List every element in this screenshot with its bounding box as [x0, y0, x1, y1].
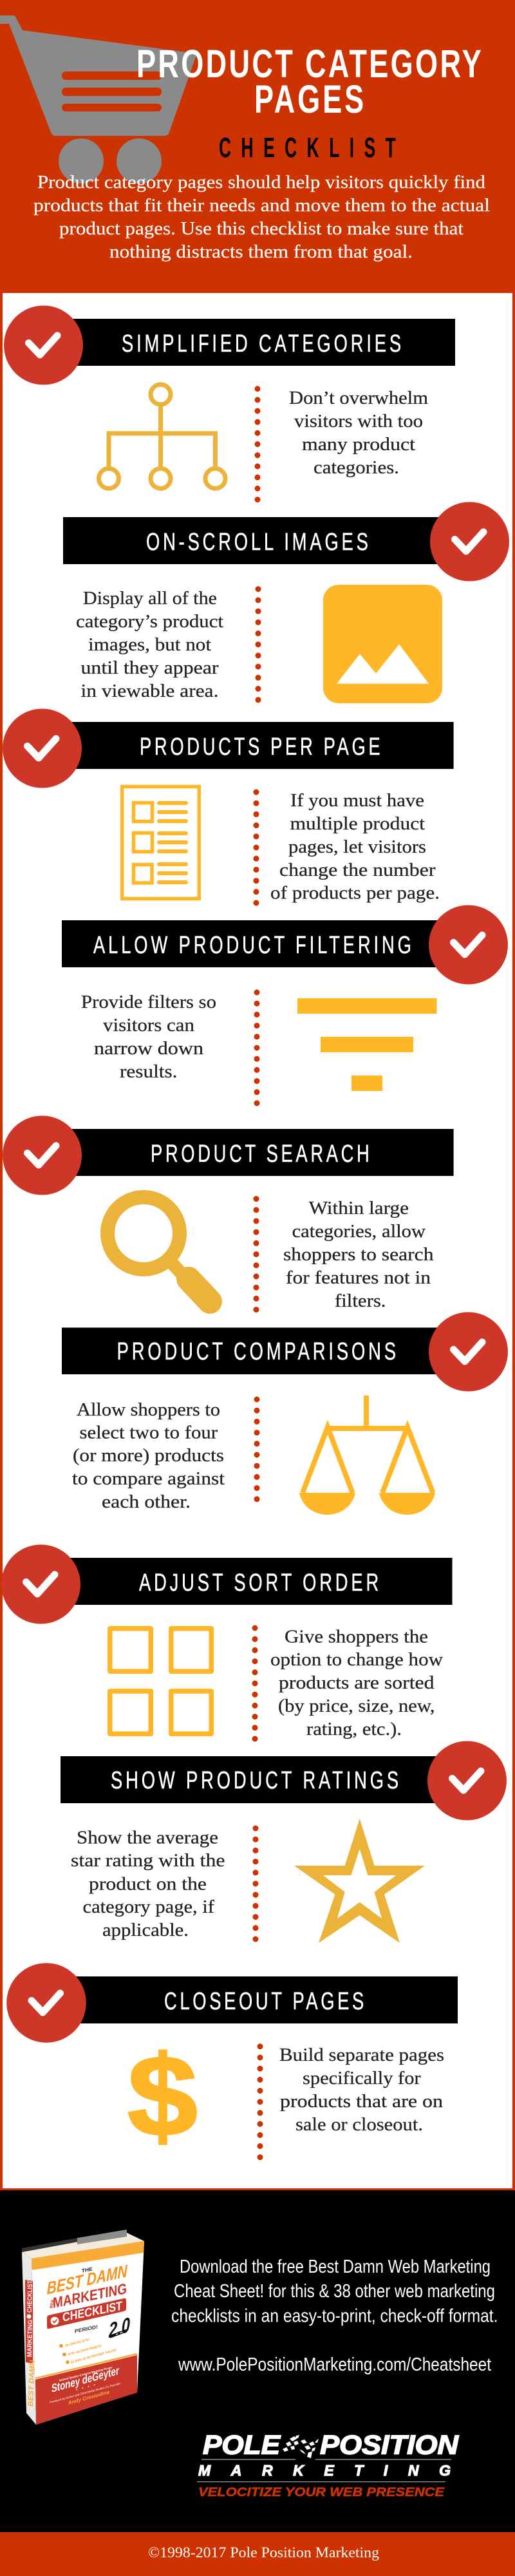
intro text [33, 172, 490, 262]
description: option to change how [270, 1650, 444, 1670]
section: products per page [3, 708, 454, 903]
description: Show the average [77, 1828, 218, 1848]
book cover image: Foreword by Author and Orbit Media Studios Co-Founder [50, 2382, 120, 2404]
book cover image: CHECKLIST [26, 2280, 34, 2313]
book cover image: BEST DAMN [27, 2360, 37, 2407]
description: products that are on [280, 2092, 443, 2112]
intro text: nothing distracts them from that goal. [109, 242, 413, 262]
heading bar [64, 1129, 454, 1176]
logo: Pole Position Marketing: VELOCITIZE YOUR WEB PRESENCE [198, 2485, 445, 2499]
description: to compare against [72, 1469, 225, 1489]
description: category’s product [76, 612, 223, 632]
description: Within large [309, 1198, 409, 1218]
description [270, 791, 440, 903]
book cover image: $1,000s IN INCREASED SALES! [70, 2348, 117, 2365]
description [76, 589, 223, 701]
section: simplified categories [4, 305, 455, 500]
description: product on the [89, 1874, 207, 1895]
description: filters. [335, 1291, 386, 1311]
description: specifically for [303, 2069, 421, 2088]
description: categories, allow [292, 1222, 426, 1242]
book cover image: CHECKLIST [62, 2300, 122, 2325]
icon: magnifying glass [108, 1197, 210, 1302]
description: multiple product [290, 814, 425, 834]
heading bar: SIMPLIFIED CATEGORIES [122, 330, 401, 357]
description [71, 1828, 225, 1940]
book cover image: Stoney deGeyter [52, 2363, 119, 2395]
description: Allow shoppers to [77, 1400, 220, 1420]
description: results. [120, 1062, 178, 1082]
heading bar [68, 1976, 458, 2023]
icon: dollar sign: $ [127, 2032, 198, 2160]
call to action text [171, 2257, 498, 2375]
icon: check badge [3, 1115, 82, 1195]
section: product comparisons [62, 1312, 508, 1515]
description: visitors can [103, 1016, 194, 1036]
description [289, 388, 428, 478]
heading bar: ON-SCROLL IMAGES [146, 529, 368, 556]
heading bar: CLOSEOUT PAGES [164, 1988, 364, 2015]
icon: check badge [429, 905, 508, 984]
description: in viewable area. [81, 681, 219, 701]
icon: checkered flags [283, 2435, 319, 2458]
title: PRODUCT CATEGORY [136, 42, 482, 86]
heading bar: PRODUCT SEARACH [151, 1141, 370, 1168]
description: rating, etc.). [306, 1719, 402, 1739]
section: adjust sort order [1, 1544, 452, 1739]
heading bar [62, 1328, 448, 1374]
book cover image: THE [82, 2266, 93, 2274]
heading bar [64, 1558, 452, 1605]
footer bar: ©1998-2017 Pole Position Marketing [148, 2544, 380, 2561]
icon: four-square grid [110, 1629, 211, 1734]
description: category page, if [82, 1897, 215, 1917]
description [279, 2045, 444, 2135]
description: many product [302, 435, 415, 455]
logo: Pole Position Marketing: POSITION [320, 2430, 460, 2460]
section: closeout pages [6, 1963, 458, 2160]
book cover image: National Speaker & Internet Marketing Pioneer [59, 2365, 113, 2382]
book cover image: 675+ ACTION POINTS! [68, 2344, 102, 2356]
icon: star outline [294, 1819, 425, 1943]
description: (by price, size, new, [278, 1696, 435, 1716]
book cover image [22, 2230, 144, 2425]
icon: hierarchy tree [99, 384, 225, 488]
description: applicable. [102, 1920, 189, 1940]
heading bar [62, 920, 448, 967]
icon: balance scale [299, 1396, 435, 1515]
footer bar [0, 2532, 515, 2576]
icon: document list [122, 787, 199, 899]
description: Give shoppers the [285, 1627, 428, 1647]
icon: check badge [429, 1312, 508, 1391]
heading bar: ADJUST SORT ORDER [139, 1569, 379, 1596]
logo: Pole Position Marketing [197, 2430, 460, 2499]
panel: white checklist body [0, 292, 515, 2190]
description: select two to four [80, 1423, 218, 1443]
description: change the number [279, 860, 436, 880]
title [136, 42, 482, 122]
description: narrow down [94, 1039, 203, 1059]
heading bar [61, 1756, 447, 1803]
title: PAGES [254, 77, 364, 122]
book cover image: WEB [50, 2299, 55, 2309]
heading bar: SHOW PRODUCT RATINGS [111, 1767, 398, 1794]
description [283, 1198, 434, 1311]
description: Display all of the [83, 589, 217, 609]
icon: shopping cart [0, 15, 197, 184]
book cover image: BEST DAMN [47, 2260, 128, 2298]
book cover image: PERIOD! [75, 2324, 98, 2334]
icon: check badge [3, 708, 82, 788]
description: Build separate pages [279, 2045, 444, 2065]
icon: check badge [6, 1963, 86, 2043]
icon: check badge [430, 502, 509, 581]
description: pages, let visitors [288, 837, 426, 857]
heading bar: ALLOW PRODUCT FILTERING [93, 932, 411, 959]
description: categories. [314, 458, 399, 478]
heading bar: PRODUCT COMPARISONS [117, 1338, 396, 1365]
description [72, 1400, 225, 1512]
description: If you must have [290, 791, 424, 811]
heading bar [64, 722, 454, 769]
description: shoppers to search [283, 1245, 434, 1265]
section: on-scroll images [63, 502, 509, 703]
icon: check badge [427, 1741, 507, 1820]
heading bar [63, 517, 449, 564]
book cover image: 29 CHECKLISTS! [64, 2338, 89, 2348]
description: until they appear [81, 658, 219, 678]
description: products are sorted [279, 1673, 434, 1693]
description [270, 1627, 444, 1739]
description: Provide filters so [81, 992, 216, 1012]
book cover image: MARKETING [53, 2280, 127, 2311]
intro text: product pages. Use this checklist to make sure that [59, 218, 464, 239]
book cover image: MARKETING [26, 2320, 34, 2357]
description: images, but not [88, 635, 211, 655]
description: (or more) products [73, 1446, 224, 1466]
book cover image: Andy Crestodina [68, 2389, 109, 2406]
description: Don’t overwhelm [289, 388, 428, 408]
description: of products per page. [270, 884, 440, 903]
icon: check badge [1, 1544, 80, 1624]
description: star rating with the [71, 1851, 225, 1871]
description: sale or closeout. [295, 2115, 423, 2135]
heading bar: PRODUCTS PER PAGE [140, 734, 380, 761]
logo: Pole Position Marketing: MARKETING [198, 2462, 451, 2479]
heading bar [64, 319, 455, 366]
section: show product ratings [61, 1741, 507, 1943]
description: each other. [102, 1492, 191, 1512]
description [81, 992, 216, 1082]
icon: check badge [4, 305, 83, 385]
subtitle: checklist: CHECKLIST [219, 131, 396, 164]
logo: Pole Position Marketing: POLE [203, 2430, 281, 2460]
book cover image: 2.0 [108, 2313, 130, 2342]
panel: header [0, 0, 515, 292]
book cover image: **** [76, 2383, 96, 2393]
icon: image placeholder [323, 585, 442, 703]
intro text: Product category pages should help visitors quickly find [37, 172, 486, 193]
intro text: products that fit their needs and move them to the actual [33, 195, 490, 216]
panel: download promotion [22, 2230, 498, 2499]
description: for features not in [286, 1268, 431, 1288]
icon: filter bars [297, 998, 436, 1091]
section: product search [3, 1115, 454, 1311]
section: allow product filtering [62, 905, 508, 1104]
description: visitors with too [294, 412, 423, 431]
